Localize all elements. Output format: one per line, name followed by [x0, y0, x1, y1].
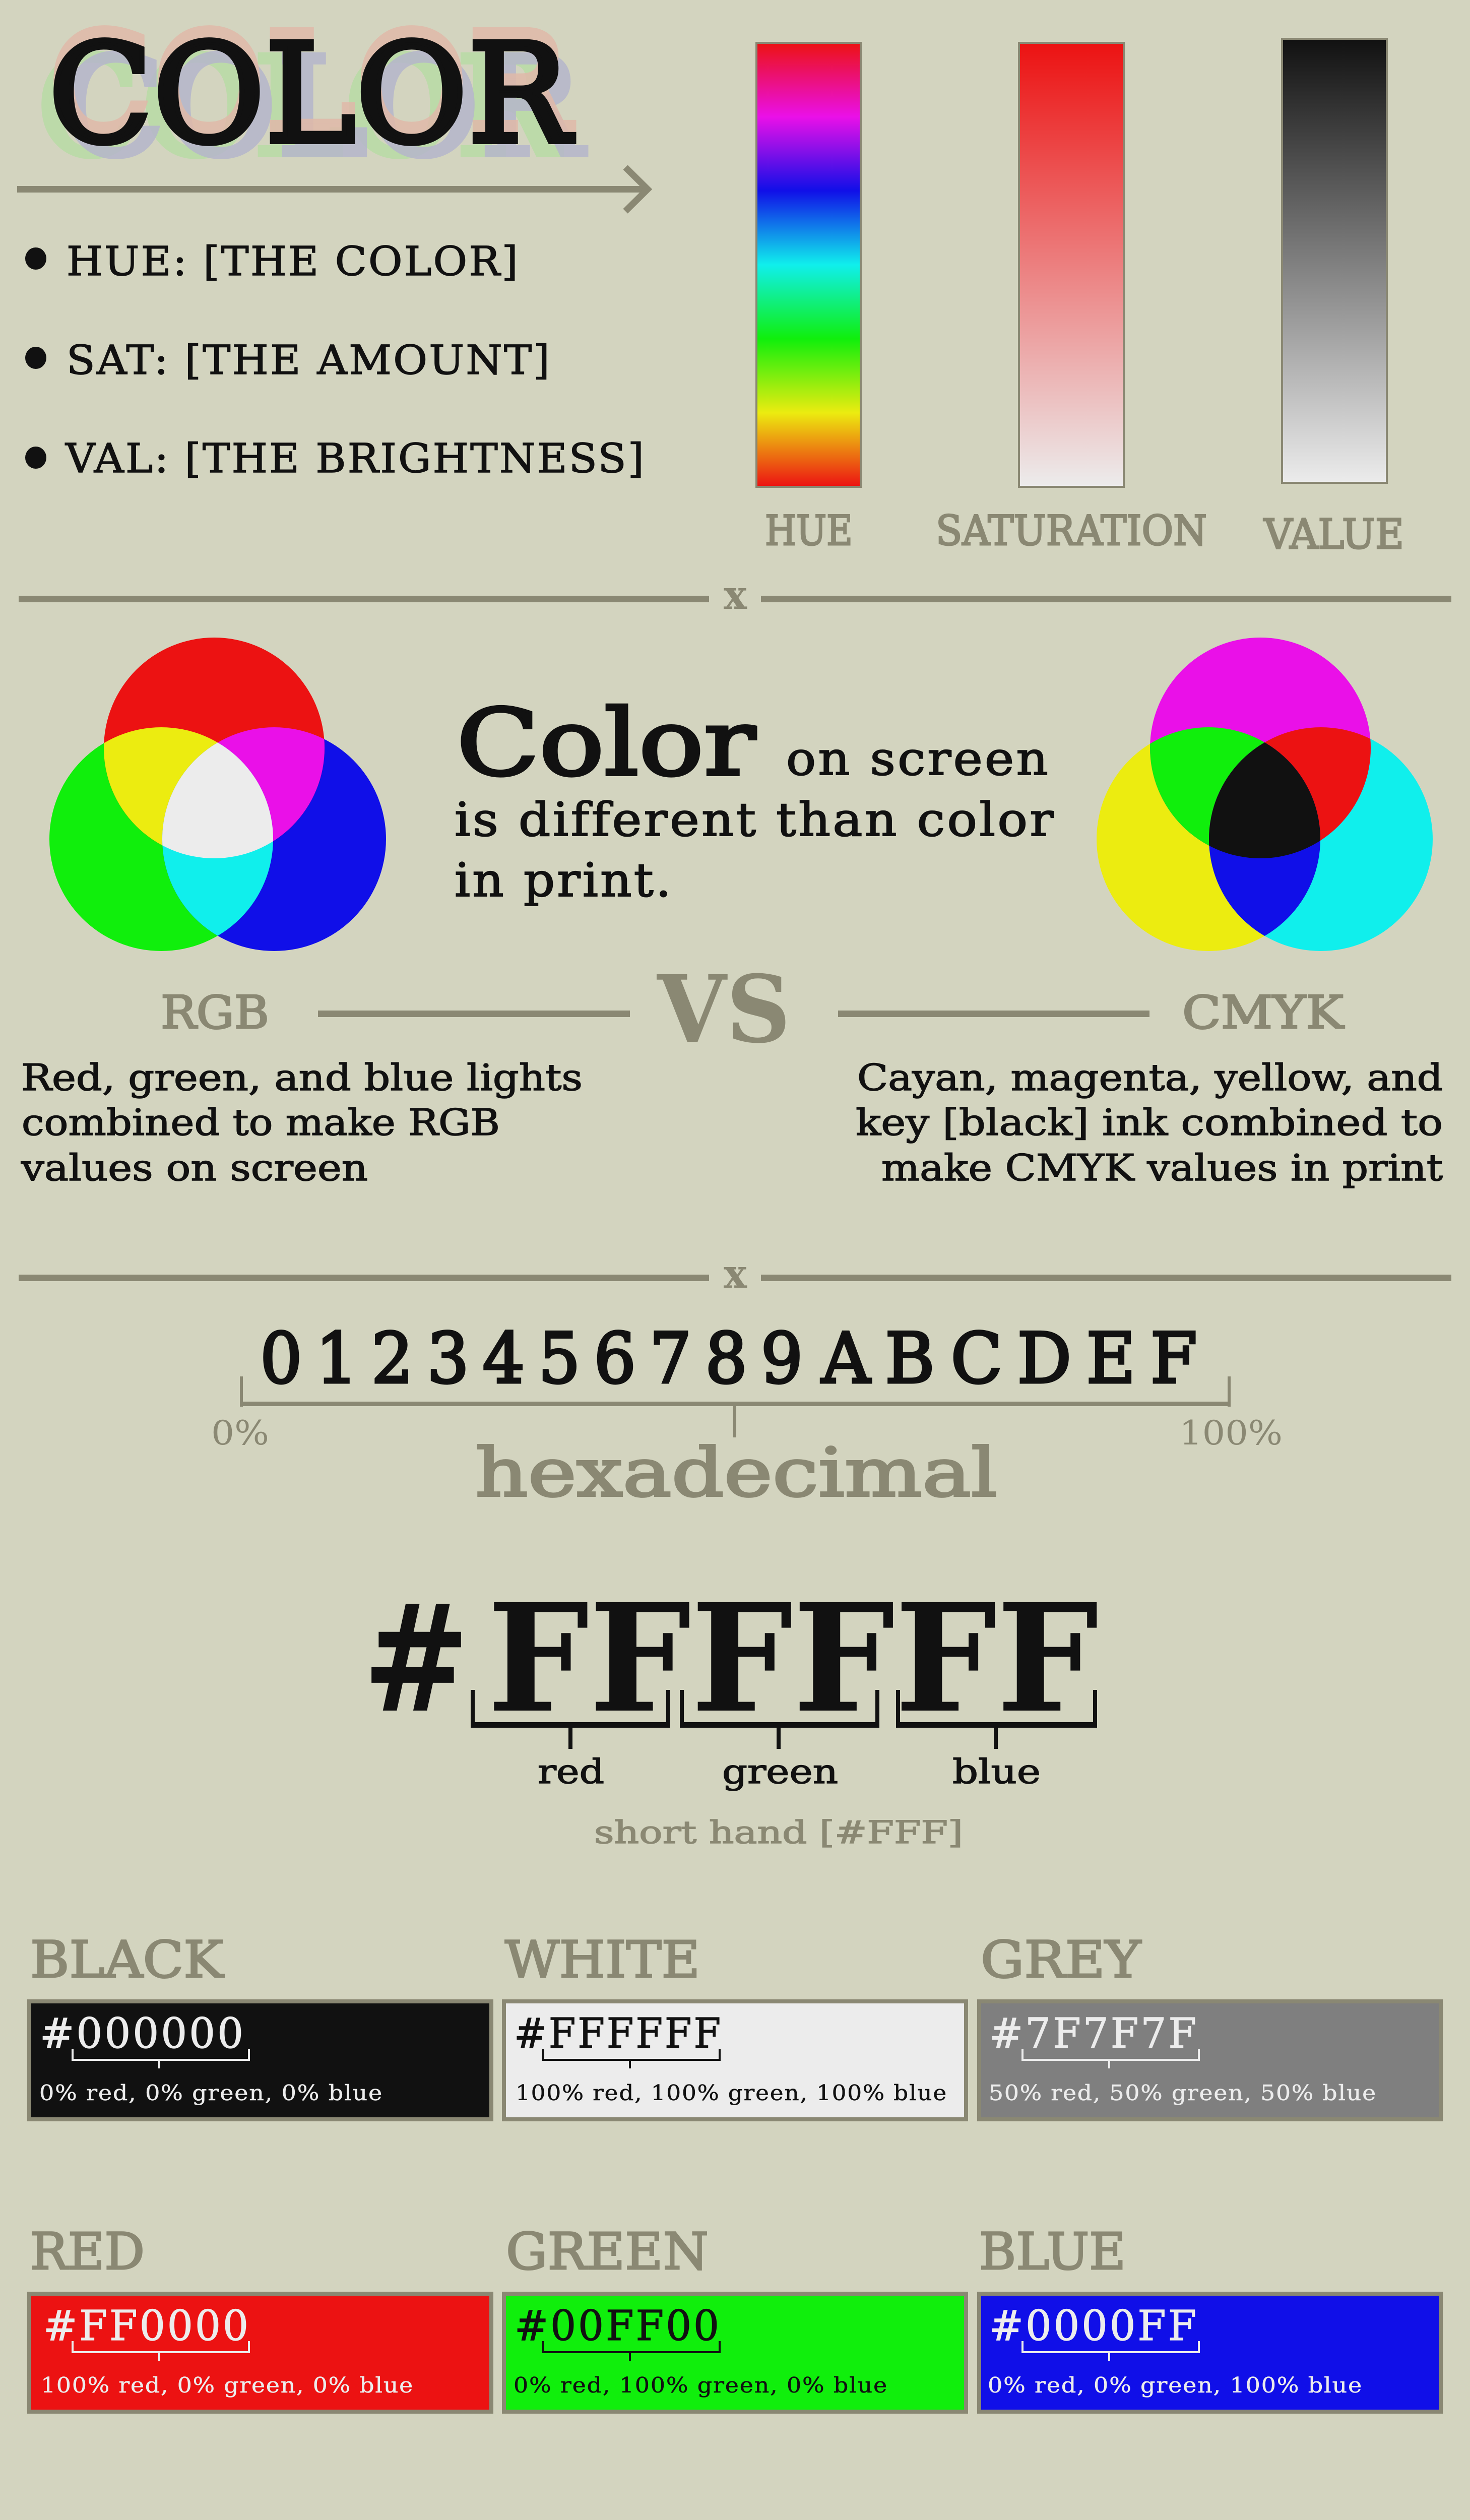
RGB description: combined to make RGB — [22, 1101, 500, 1144]
swatch: black: 0% red, 0% green, 0% blue — [39, 2081, 383, 2105]
bracket: green — [680, 1690, 879, 1749]
swatch: grey: GREY — [981, 1930, 1141, 1989]
swatch: blue: #0000FF — [989, 2302, 1198, 2350]
swatch: green: 0% red, 100% green, 0% blue — [514, 2373, 888, 2398]
label: RGB: RGB — [161, 986, 269, 1039]
arrow — [17, 167, 648, 211]
hue / saturation / value list — [25, 238, 646, 482]
CMYK venn diagram — [1097, 638, 1433, 951]
label: hexadecimal: hexadecimal — [475, 1434, 997, 1512]
label: VS: VS — [656, 955, 791, 1064]
value gradient bar — [1263, 39, 1404, 558]
hue gradient bar — [756, 43, 861, 555]
label: green: green — [722, 1752, 838, 1791]
divider 1: x — [724, 572, 747, 618]
swatch: blue: BLUE — [979, 2222, 1126, 2281]
title: COLOR with RGB offset shadows: COLOR — [48, 3, 574, 162]
RGB description — [21, 1056, 583, 1189]
swatch: white: #FFFFFF — [514, 2010, 723, 2058]
divider 1 — [19, 572, 1451, 618]
saturation gradient bar: SATURATION — [936, 508, 1207, 555]
RGB venn diagram — [49, 638, 386, 951]
title: COLOR with RGB offset shadows: COLOR — [36, 28, 562, 187]
value gradient bar: VALUE — [1263, 511, 1404, 558]
hue gradient bar: HUE — [765, 508, 853, 555]
heading: color on screen vs print — [455, 689, 1056, 907]
swatch: black: #000000 — [40, 2010, 245, 2058]
label: red: red — [538, 1752, 604, 1791]
CMYK description: key [black] ink combined to — [856, 1101, 1443, 1144]
swatch: grey — [977, 1930, 1443, 2121]
big hex code #FFFFFF — [363, 1571, 1099, 1851]
scale bracket — [240, 1376, 1231, 1437]
scale ends: 0% — [211, 1414, 269, 1453]
big hex code #FFFFFF: # — [363, 1571, 470, 1746]
bullet: hue: HUE: [THE COLOR] — [67, 238, 520, 285]
divider 2: x — [724, 1250, 747, 1297]
hexadecimal scale: 100% — [1179, 1414, 1283, 1453]
CMYK description: Cayan, magenta, yellow, and — [857, 1056, 1443, 1099]
bracket: blue — [896, 1690, 1097, 1749]
swatch: white: WHITE — [505, 1930, 700, 1989]
bullet: saturation: SAT: [THE AMOUNT] — [67, 337, 551, 384]
swatch: green — [502, 2222, 968, 2414]
RGB description: Red, green, and blue lights — [21, 1056, 583, 1099]
swatch: grey: #7F7F7F — [989, 2010, 1198, 2058]
label: blue: blue — [952, 1752, 1041, 1791]
title: COLOR with RGB offset shadows: COLOR — [60, 28, 587, 187]
bracket: red — [471, 1690, 670, 1749]
swatch: green: #00FF00 — [515, 2302, 721, 2350]
heading: color on screen vs print: in print. — [455, 853, 673, 907]
swatch: black: BLACK — [30, 1930, 224, 1989]
hex digits: ABCDEF — [821, 1318, 1212, 1399]
RGB description: values on screen — [21, 1147, 368, 1189]
swatch: green: GREEN — [506, 2222, 709, 2281]
hex digits — [260, 1318, 1212, 1399]
bullet: value: VAL: [THE BRIGHTNESS] — [65, 435, 646, 482]
swatch: grey: 50% red, 50% green, 50% blue — [989, 2081, 1377, 2105]
label: CMYK: CMYK — [1182, 986, 1345, 1039]
hexadecimal scale — [211, 1318, 1283, 1512]
heading: color on screen vs print: on screen — [786, 732, 1050, 786]
saturation gradient bar — [936, 43, 1207, 555]
divider 2 — [19, 1250, 1451, 1297]
heading: color on screen vs print: Color — [457, 689, 755, 796]
RGB vs CMYK row — [161, 955, 1345, 1064]
swatch: black — [27, 1930, 493, 2121]
swatch: blue — [977, 2222, 1443, 2414]
swatch: red: RED — [30, 2222, 145, 2281]
big hex code #FFFFFF: FFFFFF — [487, 1571, 1099, 1746]
swatch: white: 100% red, 100% green, 100% blue — [516, 2081, 947, 2105]
swatch: white — [502, 1930, 968, 2121]
swatch: blue: 0% red, 0% green, 100% blue — [988, 2373, 1363, 2398]
heading: color on screen vs print: is different than color — [455, 793, 1056, 847]
hex digits: 0123456789 — [260, 1318, 816, 1399]
swatch: red: #FF0000 — [43, 2302, 250, 2350]
title: COLOR with RGB offset shadows: COLOR — [48, 15, 574, 174]
swatch: red — [27, 2222, 493, 2414]
CMYK description: make CMYK values in print — [881, 1147, 1443, 1189]
CMYK description — [856, 1056, 1443, 1189]
swatch: red: 100% red, 0% green, 0% blue — [41, 2373, 414, 2398]
short hand note: short hand [#FFF] — [594, 1814, 963, 1851]
